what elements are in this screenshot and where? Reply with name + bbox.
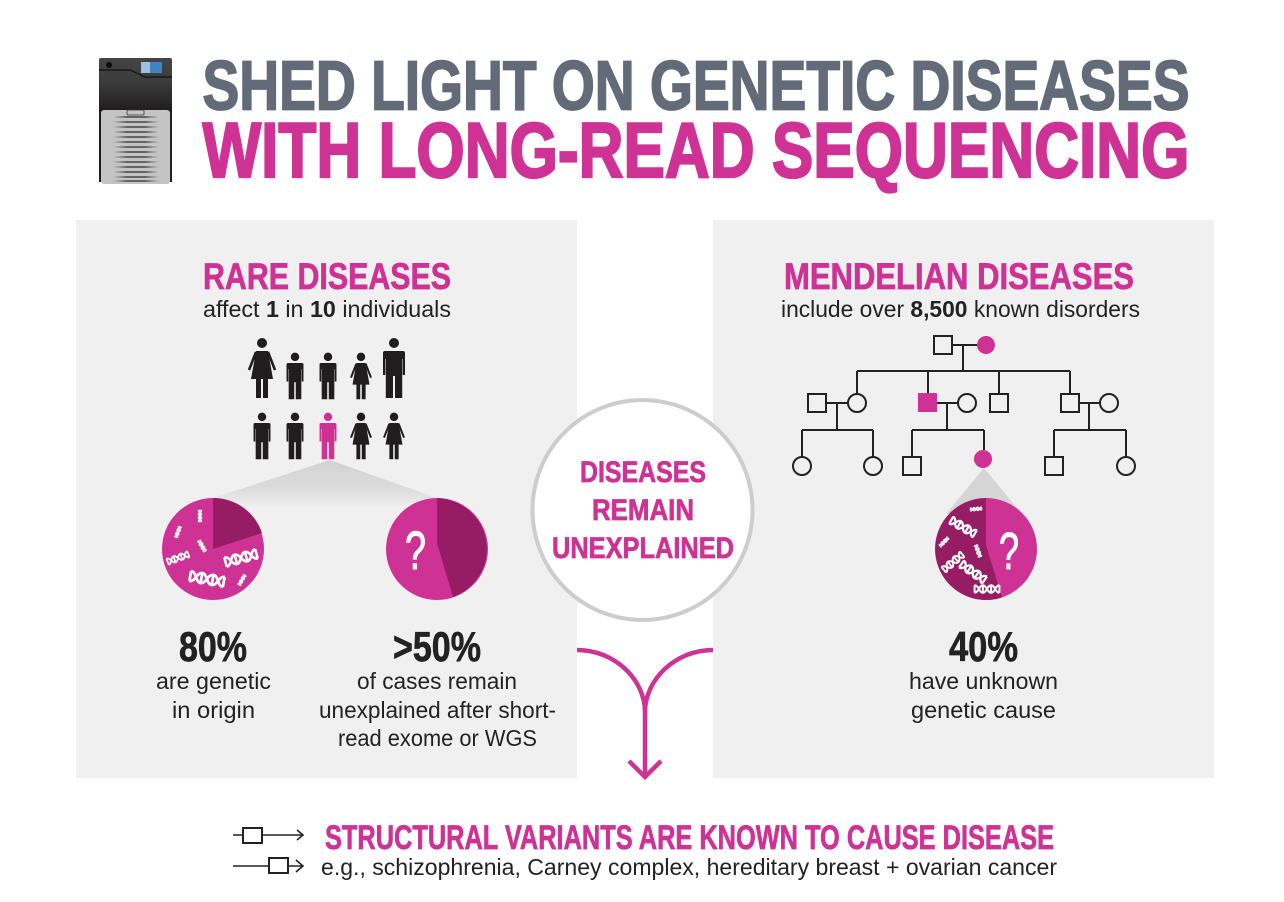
arrow: merging curves pointing down xyxy=(577,650,713,777)
pedigree chart xyxy=(793,336,1135,475)
stat: over 50% xyxy=(319,623,556,751)
pie chart: 40% unknown cause xyxy=(935,498,1037,600)
pie chart: 80% genetic xyxy=(162,498,264,600)
callout: diseases remain unexplained: UNEXPLAINED xyxy=(552,532,734,565)
panel: mendelian diseases xyxy=(713,220,1214,778)
title xyxy=(202,46,1190,194)
pie chart: 40% unknown cause: ? xyxy=(999,523,1019,581)
heading: rare diseases: RARE DISEASES xyxy=(203,256,451,297)
stat: over 50%: unexplained after short- xyxy=(319,697,556,723)
panel: rare diseases xyxy=(76,220,577,778)
callout: diseases remain unexplained: REMAIN xyxy=(592,494,694,527)
callout: diseases remain unexplained: DISEASES xyxy=(580,456,706,489)
stat: 40%: 40% xyxy=(949,623,1018,670)
stat: 80% xyxy=(156,623,271,723)
stat: 80%: are genetic xyxy=(156,668,271,694)
stat: 80%: 80% xyxy=(179,623,247,670)
icon: structural variant arrows xyxy=(233,828,303,873)
stat: over 50%: >50% xyxy=(393,623,481,670)
subheading: mendelian diseases: include over 8,500 known disorders xyxy=(781,296,1140,322)
text: disease examples: e.g., schizophrenia, Carney complex, hereditary breast + ovarian cancer xyxy=(321,854,1057,880)
heading: mendelian diseases: MENDELIAN DISEASES xyxy=(784,256,1134,297)
zoom cone from highlighted person xyxy=(213,460,437,509)
pie chart: over 50% unexplained: ? xyxy=(405,521,426,581)
icon group: ten people xyxy=(249,338,405,459)
stat: 40%: have unknown xyxy=(909,668,1058,694)
pie chart: over 50% unexplained xyxy=(386,498,488,600)
subheading: rare diseases: affect 1 in 10 individuals xyxy=(203,296,451,322)
callout: diseases remain unexplained xyxy=(532,400,752,620)
stat: 40% xyxy=(909,623,1058,723)
stat: over 50%: read exome or WGS xyxy=(338,725,537,751)
stat: 40%: genetic cause xyxy=(911,697,1056,723)
heading: structural variants: STRUCTURAL VARIANTS ARE KNOWN TO CAUSE DISEASE xyxy=(325,819,1054,857)
stat: over 50%: of cases remain xyxy=(357,668,517,694)
zoom cone from affected child xyxy=(946,468,1022,514)
stat: 80%: in origin xyxy=(172,697,255,723)
icon: sequencing instrument xyxy=(99,58,172,184)
